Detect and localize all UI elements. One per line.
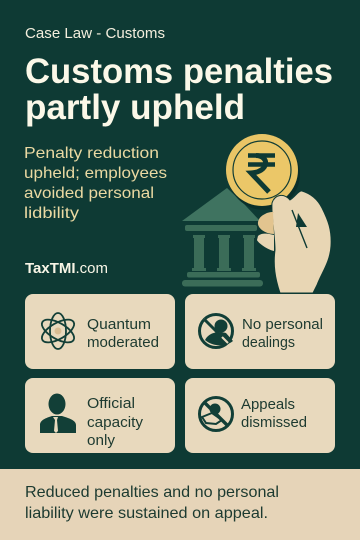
hand	[272, 191, 331, 293]
subtitle: avoided personal	[24, 185, 154, 202]
panel: quantum moderated	[25, 294, 175, 369]
subtitle: lidbility	[24, 205, 79, 222]
title: Customs penalties	[25, 52, 333, 91]
icon: prohibited person	[200, 314, 233, 348]
label	[241, 397, 307, 431]
footer text: Reduced penalties and no personal	[25, 484, 279, 501]
title	[25, 52, 333, 127]
icon: prohibited appeal	[200, 398, 232, 430]
label: capacity	[87, 415, 144, 431]
label: Official	[87, 396, 135, 412]
subtitle	[24, 145, 167, 222]
label: No personal	[242, 317, 323, 333]
eyebrow: case law label: Case Law - Customs	[25, 26, 165, 42]
icon: atom	[38, 313, 78, 349]
panel: no personal dealings	[185, 294, 335, 369]
coin	[226, 134, 300, 210]
label: dealings	[242, 335, 295, 351]
label: dismissed	[241, 415, 307, 431]
label: moderated	[87, 335, 159, 351]
finger: upper	[258, 212, 274, 234]
label: Appeals	[241, 397, 295, 413]
icon: person in suit	[40, 394, 76, 433]
footer text	[25, 484, 279, 522]
label	[242, 317, 323, 351]
subtitle: upheld; employees	[24, 165, 167, 182]
title: partly upheld	[25, 88, 245, 127]
icon: hand holding rupee coin	[226, 134, 331, 293]
label	[87, 396, 144, 449]
panel: official capacity only	[25, 378, 175, 453]
footer text: liability were sustained on appeal.	[25, 505, 268, 522]
label: Quantum	[87, 317, 151, 333]
brand: TaxTMI.com: TaxTMI.com	[25, 261, 108, 277]
label	[87, 317, 159, 351]
footer band	[0, 469, 360, 540]
label: only	[87, 433, 116, 449]
panel: appeals dismissed	[185, 378, 335, 453]
icon: bank building	[182, 188, 263, 286]
subtitle: Penalty reduction	[24, 145, 159, 162]
finger: lower	[257, 234, 274, 251]
